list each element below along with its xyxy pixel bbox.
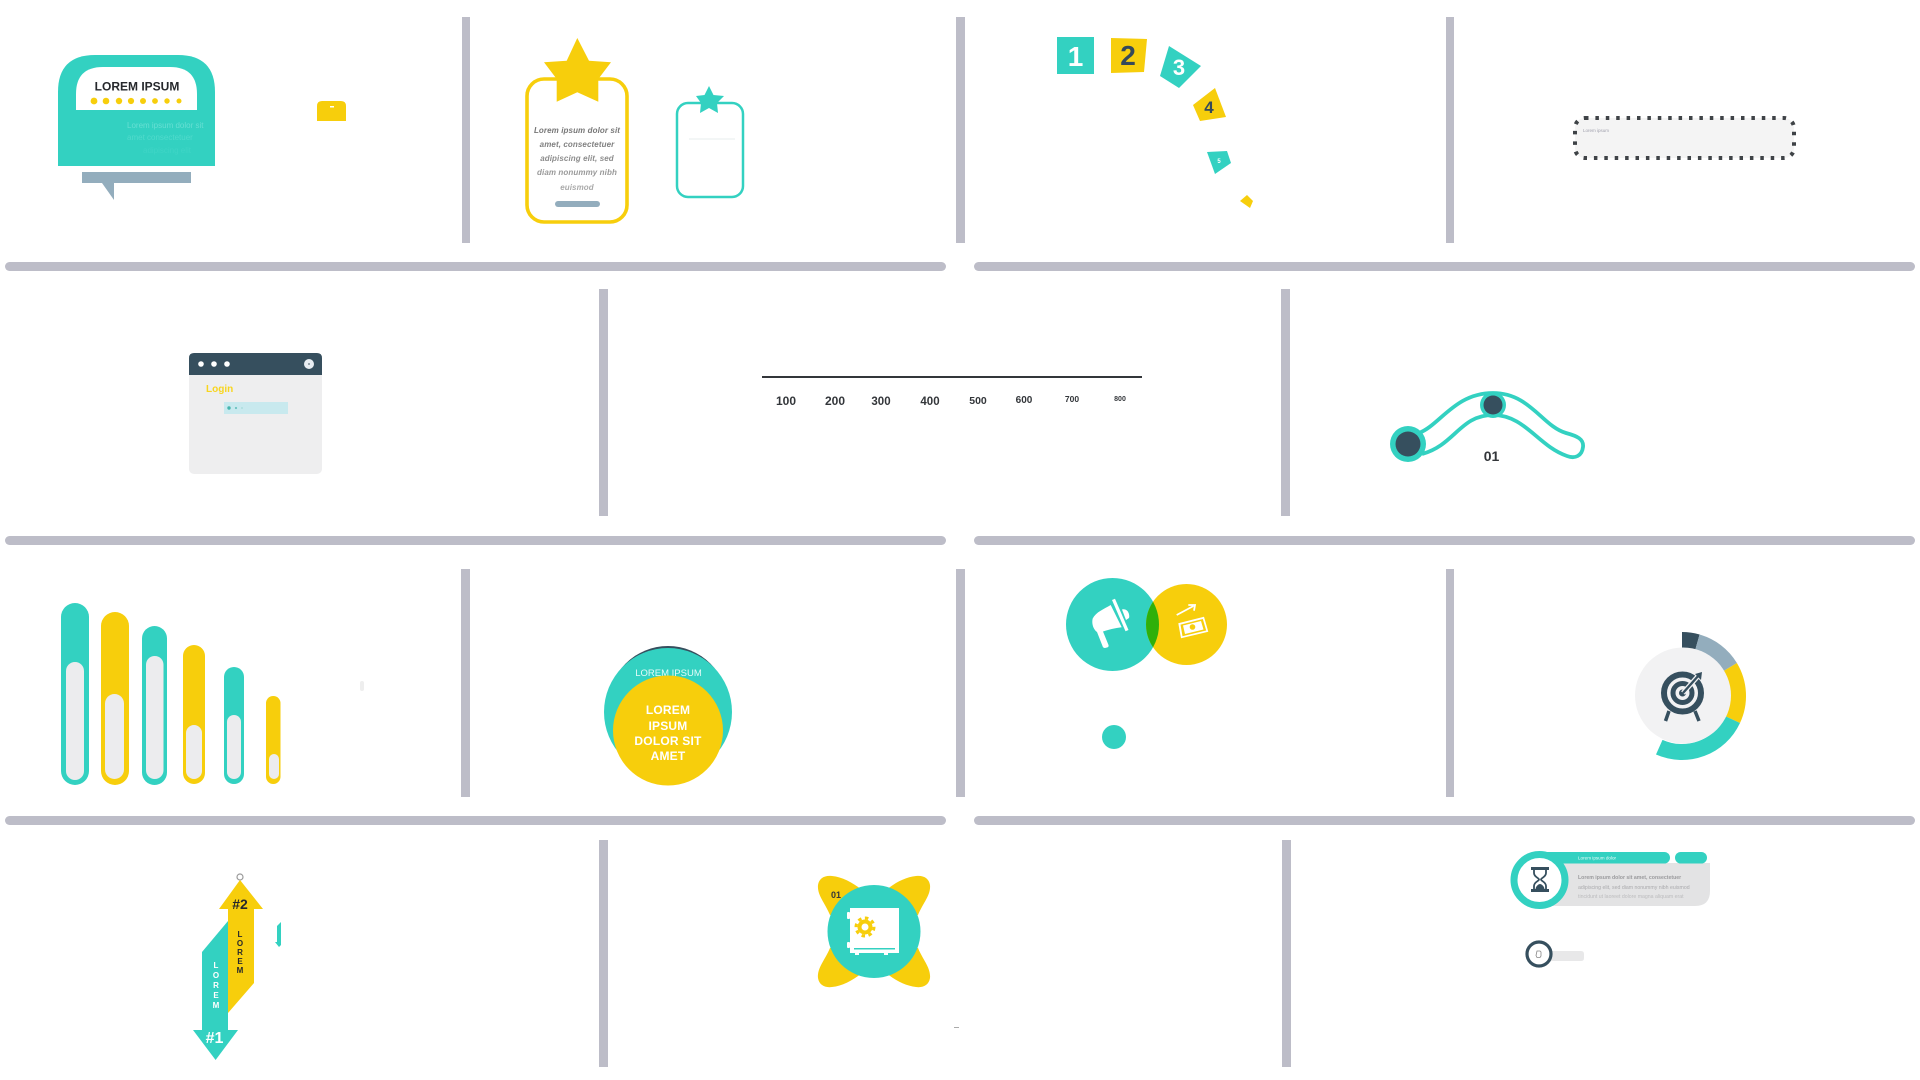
yellow arrow vertical text: [237, 930, 244, 975]
yellow arrow vertical text: L: [238, 930, 243, 939]
centre disc: [1635, 648, 1731, 744]
step 1: [1057, 37, 1094, 74]
panel: curved path diagram: [1390, 392, 1583, 464]
tiny label: Lorem ipsum: [1583, 128, 1609, 133]
panel: target donut: [1635, 632, 1746, 760]
input field: [224, 402, 288, 414]
step 3: 3: [1173, 55, 1185, 80]
panel: clover safe icon: [818, 876, 930, 987]
overlap lens: [1146, 602, 1159, 648]
panel: login window: [189, 353, 322, 474]
teal arrow vertical text: [213, 961, 220, 1010]
dark back circle: [608, 646, 728, 766]
label 01: 01: [1484, 448, 1499, 464]
yellow circle text: IPSUM: [648, 719, 688, 733]
step 6: [1240, 195, 1253, 208]
panel text: [1578, 875, 1690, 900]
teal arrow vertical text: M: [213, 1001, 220, 1010]
yellow arrow vertical text: E: [237, 957, 243, 966]
label #2: #2: [232, 896, 248, 912]
grey text panel: [1550, 863, 1710, 906]
small node: [1480, 392, 1506, 418]
yellow arrow vertical text: O: [237, 939, 243, 948]
header label: Lorem ipsum dolor: [1578, 856, 1617, 860]
icon: small yellow tag: [317, 101, 346, 121]
step 4: [1193, 88, 1226, 121]
teal small pill: [1675, 852, 1707, 864]
teal arrow vertical text: E: [213, 991, 219, 1000]
teal circle label: LOREM IPSUM: [635, 668, 702, 679]
scale numbers: 300: [871, 396, 891, 408]
panel: numbered arc steps: [1057, 37, 1253, 208]
panel: teal star card: [677, 86, 743, 197]
label 01: 01: [831, 890, 841, 900]
yellow arrow vertical text: M: [237, 966, 244, 975]
icon: tiny hand: [1536, 951, 1541, 958]
donut segment dark: [1682, 632, 1700, 650]
panel: pill bar chart: [61, 603, 364, 785]
panel: yellow star card: [527, 38, 627, 222]
card italic text: amet, consectetuer: [540, 140, 615, 149]
ring: [1514, 854, 1565, 906]
donut segment blue grey: [1695, 634, 1737, 671]
teal arrow vertical text: L: [214, 961, 219, 970]
teal bubble body: [58, 55, 215, 166]
yellow dot row: [91, 98, 182, 104]
faint text line: [689, 138, 735, 140]
teal circle: [1066, 578, 1159, 671]
scale numbers: [776, 394, 1126, 408]
faint body text: amet consectetuer: [127, 133, 193, 142]
scale numbers: 500: [969, 395, 987, 407]
faint body text: [127, 121, 204, 155]
yellow arrow: [219, 880, 263, 1013]
grey pill: [1545, 951, 1584, 961]
panel text: tincidunt ut laoreet dolore magna aliquam erat: [1578, 894, 1684, 900]
close button: [304, 359, 314, 369]
card italic text: [534, 126, 620, 192]
login label: Login: [206, 384, 233, 395]
yellow circle text: AMET: [651, 749, 686, 763]
panel text: adipiscing elit, sed diam nonummy nibh euismod: [1578, 885, 1690, 891]
donut segment yellow: [1723, 663, 1746, 723]
window header: [189, 353, 322, 375]
teal circle: [828, 885, 920, 978]
scale numbers: 400: [920, 396, 940, 408]
panel: hourglass callout: [1514, 852, 1710, 906]
heading text: LOREM IPSUM: [95, 80, 179, 94]
bar 6: [266, 696, 280, 784]
step 2: 2: [1120, 40, 1136, 71]
card italic text: diam nonummy nibh: [537, 168, 617, 177]
teal circle: [604, 648, 732, 776]
bar 1: [61, 603, 89, 785]
icon: hourglass: [1531, 867, 1549, 892]
small dash mark: [954, 1027, 959, 1028]
small grey mark: [360, 681, 364, 691]
teal arrow vertical text: O: [213, 971, 219, 980]
scale numbers: 600: [1016, 395, 1033, 406]
step 1: 1: [1068, 41, 1083, 72]
panel: dotted text box: [1575, 118, 1794, 158]
icon: teal dot: [1102, 725, 1126, 749]
axis line: [762, 376, 1142, 378]
icon: megaphone: [1092, 599, 1129, 648]
panel: opposing arrows: [193, 874, 263, 1060]
bar 2: [101, 612, 129, 785]
panel: numeric scale: [762, 376, 1142, 408]
card italic text: adipiscing elit, sed: [540, 154, 615, 163]
teal header bar: [1540, 852, 1670, 864]
bar 5: [224, 667, 244, 784]
grey callout bar with tail: [82, 172, 191, 200]
panel text: Lorem ipsum dolor sit amet, consectetuer: [1578, 875, 1681, 881]
bar 3: [142, 626, 167, 785]
yellow circle: [1146, 584, 1227, 665]
ring: [1527, 942, 1551, 966]
teal star: [696, 86, 724, 113]
scale numbers: 800: [1114, 396, 1126, 403]
faint body text: adipiscing elit: [143, 146, 192, 155]
yellow arrow vertical text: R: [237, 948, 243, 957]
donut segment teal: [1656, 716, 1740, 760]
card outline: [527, 79, 627, 222]
teal arrow: [193, 921, 238, 1060]
teal arrow vertical text: R: [213, 981, 219, 990]
card italic text: euismod: [560, 183, 595, 192]
small ring: [237, 874, 243, 880]
icon: target with arrow: [1664, 672, 1702, 721]
icon: safe with gear: [847, 908, 899, 955]
label #1: #1: [206, 1030, 224, 1047]
bar 4: [183, 645, 205, 784]
panel: small icon pill: [1527, 942, 1584, 966]
scale numbers: 200: [825, 394, 845, 408]
card italic text: Lorem ipsum dolor sit: [534, 126, 620, 135]
yellow circle text: LOREM: [646, 703, 690, 717]
white heading area: [76, 67, 197, 110]
large node: [1390, 426, 1426, 462]
icon: small teal arrow: [275, 922, 281, 947]
star: [544, 38, 611, 102]
scale numbers: 100: [776, 394, 796, 408]
faint body text: Lorem ipsum dolor sit: [127, 121, 204, 130]
card outline: [677, 103, 743, 197]
panel: overlapping venn circles: [1066, 578, 1227, 671]
yellow petals: [818, 876, 930, 987]
panel: stacked circles: [604, 646, 732, 786]
icon: money with arrow: [1177, 605, 1208, 638]
step 2: [1111, 38, 1147, 73]
yellow circle text: DOLOR SIT: [634, 734, 702, 748]
step 5: [1207, 151, 1231, 174]
grey button: [555, 201, 600, 207]
step 5: 5: [1217, 159, 1221, 165]
window dots: [198, 361, 230, 367]
curve outline: [1419, 393, 1583, 457]
step 3: [1160, 46, 1201, 88]
panel: speech bubble card: [58, 55, 215, 200]
yellow circle: [613, 676, 723, 786]
step 4: 4: [1204, 98, 1214, 117]
yellow circle text: [634, 703, 702, 763]
scale numbers: 700: [1065, 394, 1079, 404]
